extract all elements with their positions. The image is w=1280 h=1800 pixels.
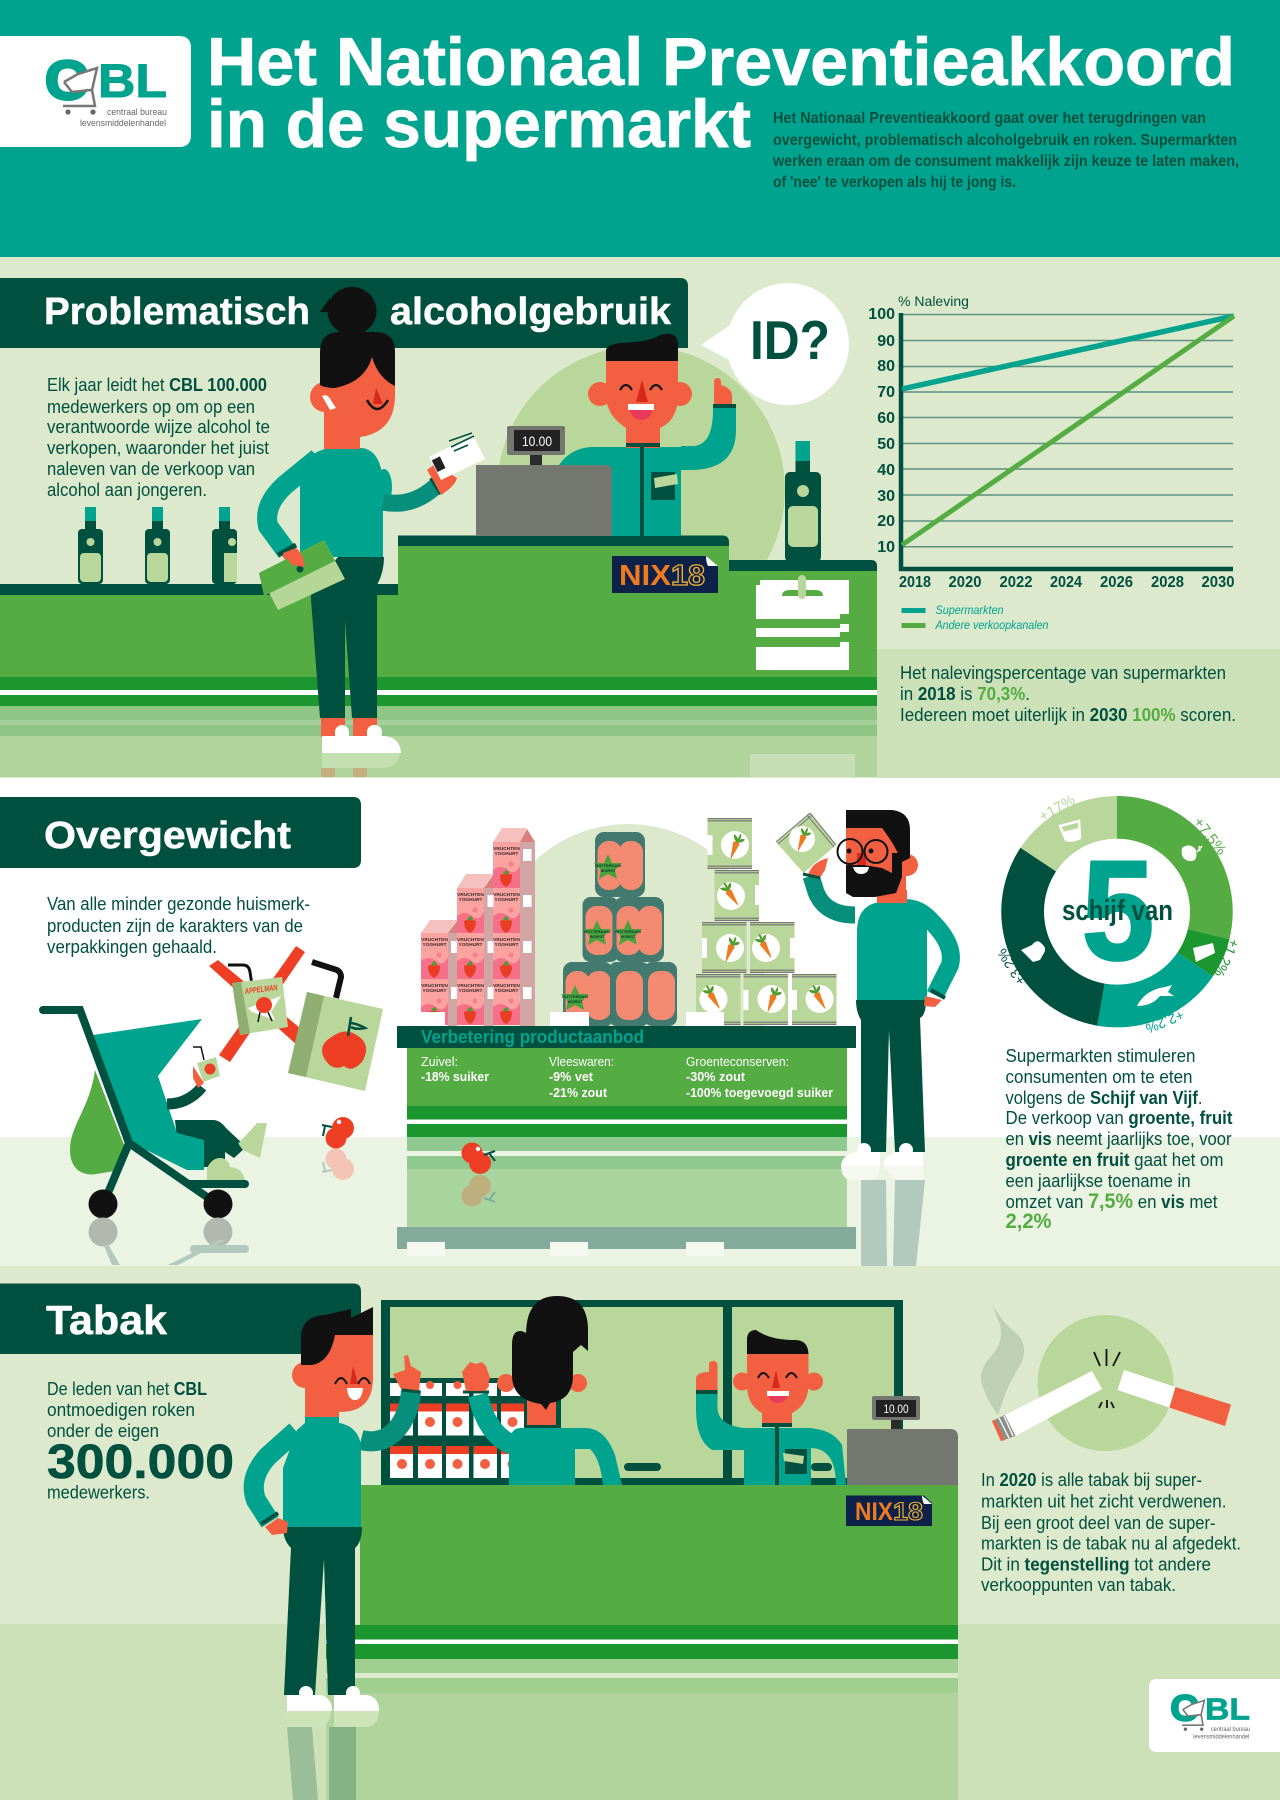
header logo panel: levensmiddelenhandel [80, 118, 166, 129]
product stack: yoghurt cartons: VRUCHTEN [457, 892, 484, 898]
text: Groenteconserven: Groenteconserven: [686, 1055, 789, 1069]
chart: % naleving: 90 [877, 333, 895, 350]
intro text: werken eraan om de consument makkelijk zijn keuze te laten maken, [772, 153, 1239, 170]
product stack: yoghurt cartons: VRUCHTEN [457, 983, 484, 989]
text: Vleeswaren: Vleeswaren: [549, 1055, 614, 1069]
sign: NIX18: NIX [619, 560, 672, 592]
chart: % naleving: 2030 [1202, 574, 1235, 591]
footer logo panel: levensmiddelenhandel [1193, 1733, 1249, 1740]
text: Schijf van Vijf [1006, 1046, 1233, 1233]
icon: bottles on shelf [78, 507, 237, 584]
sign: NIX18 tobacco: NIX [855, 1498, 893, 1526]
product stack: yoghurt cartons: VRUCHTEN [457, 937, 484, 943]
icon: apple on floor [462, 1142, 495, 1206]
banner: Tabak [0, 1284, 361, 1354]
text: Schijf van Vijf: omzet van 7,5% en vis met [1006, 1190, 1218, 1213]
text: tabak uit het zicht: In 2020 is alle tabak bij super- [981, 1470, 1202, 1490]
footer logo panel: centraal bureau [1211, 1726, 1251, 1733]
header logo panel: C [45, 49, 88, 111]
chart: schijf van vijf donut: +7,5% [1190, 814, 1230, 858]
chart: % naleving: 20 [877, 513, 895, 530]
chart: schijf van vijf donut: 5 [1082, 831, 1154, 989]
text: huismerk verpakkingen [47, 894, 310, 957]
text: CBL 100.000 employees: verantwoorde wijze alcohol te [47, 417, 270, 437]
chart: % naleving: 2022 [1000, 574, 1033, 591]
chart: % naleving: % Naleving [898, 293, 969, 309]
stroller illustration [43, 1010, 267, 1265]
register body [476, 465, 612, 536]
sign: NIX18 tobacco [846, 1496, 932, 1526]
speech bubble: ID?: ID? [750, 309, 830, 371]
intro text [772, 110, 1239, 191]
product stack: carrot cans [696, 818, 836, 1025]
product stack: yoghurt cartons: VRUCHTEN [493, 846, 520, 852]
panel: tobacco counter and window [326, 1300, 958, 1800]
panel: verbetering productaanbod counter [397, 1012, 856, 1256]
header logo panel [0, 36, 191, 147]
intro text: of 'nee' te verkopen als hij te jong is. [773, 174, 1016, 191]
icon: cash register tobacco: 10.00 [884, 1402, 909, 1416]
text: tabak uit het zicht: Bij een groot deel van de super- [981, 1513, 1216, 1533]
product stack: meat packs: WORST [590, 934, 605, 939]
text: Zuivel: -18% suiker [421, 1070, 489, 1084]
product stack: yoghurt cartons: YOGHURT [494, 897, 519, 903]
product stack: yoghurt cartons: VRUCHTEN [493, 937, 520, 943]
chart: % naleving: 10 [877, 539, 895, 556]
chart: % naleving: 2024 [1050, 574, 1082, 591]
product stack: meat packs [561, 832, 677, 1027]
text: Schijf van Vijf: en vis neemt jaarlijks toe, voor [1006, 1129, 1232, 1149]
icon: bottle on counter [785, 441, 821, 562]
icon: fallen apple [322, 1117, 354, 1180]
text: Groenteconserven: -100% toegevoegd suiker [686, 1086, 833, 1100]
product stack: yoghurt cartons: YOGHURT [494, 942, 519, 948]
product stack: meat packs: ROTTERDAM [615, 929, 641, 934]
text: CBL 100.000 employees [47, 375, 270, 500]
product stack: yoghurt cartons: YOGHURT [458, 988, 483, 994]
callout: nalevingspercentage [900, 663, 1236, 725]
banner: Tabak: Tabak [46, 1297, 167, 1343]
icon: cash register: 10.00 [522, 433, 552, 449]
chart: % naleving: 2020 [948, 574, 982, 591]
cashier character [559, 334, 736, 536]
intro text: overgewicht, problematisch alcoholgebruik en roken. Supermarkten [773, 132, 1237, 149]
icon: cigarette packs on shelf [390, 1381, 524, 1478]
text: CBL 100.000 employees: medewerkers op om op een [47, 397, 255, 417]
text: Vleeswaren: -21% zout [549, 1086, 608, 1100]
text: Schijf van Vijf: consumenten om te eten [1006, 1067, 1192, 1087]
icon: paper bags [756, 575, 849, 670]
chart legend: Andere verkoopkanalen [935, 620, 1048, 632]
title [207, 24, 1235, 162]
text: tabak uit het zicht [981, 1470, 1241, 1595]
text: 300.000 medewerkers: 300.000 [47, 1436, 234, 1489]
text: Schijf van Vijf: een jaarlijkse toename in [1006, 1171, 1190, 1191]
callout: nalevingspercentage: in 2018 is 70,3%. [900, 684, 1030, 704]
product stack: meat packs: ROTTERDAM [595, 863, 621, 868]
icon: cash register tobacco [847, 1396, 958, 1485]
text: huismerk verpakkingen: Van alle minder gezonde huismerk- [47, 894, 310, 914]
cashier character right [696, 1330, 846, 1485]
text: tabak uit het zicht: markten uit het zicht verdwenen. [981, 1492, 1226, 1512]
header logo panel: BL [98, 54, 167, 107]
product stack: meat packs: ROTTERDAM [584, 929, 610, 934]
chart: schijf van vijf donut: +1,2% [1211, 936, 1243, 980]
chart: schijf van vijf donut: +2,2% [1143, 1007, 1187, 1037]
panel: verbetering productaanbod counter: Verbetering productaanbod [421, 1026, 644, 1047]
icon: apple juice package [288, 962, 383, 1091]
chart: % naleving: 30 [877, 488, 895, 505]
product stack: yoghurt cartons: YOGHURT [422, 942, 447, 948]
product stack: yoghurt cartons: YOGHURT [458, 942, 483, 948]
chart: % naleving: 70 [877, 384, 895, 401]
text: Zuivel: Zuivel: [421, 1055, 458, 1069]
title: in de supermarkt [207, 86, 751, 162]
footer logo panel [1149, 1679, 1280, 1752]
text: Schijf van Vijf: groente en fruit gaat het om [1006, 1150, 1224, 1170]
footer logo panel: BL [1205, 1691, 1250, 1726]
chart: schijf van vijf donut: schijf van [1062, 895, 1173, 927]
product stack: yoghurt cartons [421, 828, 535, 1026]
header logo panel: centraal bureau [107, 107, 167, 118]
text: Vleeswaren: -9% vet [549, 1070, 594, 1084]
man character left [254, 1307, 421, 1800]
product stack: meat packs: WORST [568, 999, 583, 1004]
text: tabak uit het zicht: Dit in tegenstelling tot andere [981, 1554, 1211, 1574]
title: Het Nationaal Preventieakkoord [207, 24, 1235, 100]
chart: % naleving: 100 [868, 306, 895, 323]
product stack: yoghurt cartons: VRUCHTEN [421, 983, 448, 989]
intro text: Het Nationaal Preventieakkoord gaat over het terugdringen van [773, 110, 1206, 127]
text: huismerk verpakkingen: producten zijn de karakters van de [47, 916, 303, 936]
speech bubble: ID? [701, 283, 849, 405]
chart: % naleving: 40 [877, 462, 895, 479]
text: 300.000 medewerkers: De leden van het CBL [47, 1379, 207, 1399]
panel: alcohol scene background counter [0, 346, 877, 777]
product stack: yoghurt cartons: VRUCHTEN [421, 937, 448, 943]
product stack: yoghurt cartons: YOGHURT [494, 851, 519, 857]
icon: broken cigarette [981, 1304, 1231, 1451]
text: Zuivel [421, 1055, 489, 1084]
text: Groenteconserven: -30% zout [686, 1070, 746, 1084]
chart: % naleving: 2028 [1151, 574, 1184, 591]
banner: Overgewicht: Overgewicht [44, 815, 291, 857]
product stack: meat packs: ROTTERDAM [562, 994, 588, 999]
sign: NIX18: 18 [671, 560, 705, 592]
banner: Problematisch alcoholgebruik: Problematisch [44, 291, 310, 333]
banner: Problematisch alcoholgebruik [0, 278, 688, 348]
panel: backdrop circle products [492, 824, 764, 1026]
chart: % naleving: 2026 [1100, 574, 1133, 591]
product stack: yoghurt cartons: VRUCHTEN [493, 983, 520, 989]
woman character [259, 287, 485, 777]
icon: cash register [507, 426, 565, 466]
text: 300.000 medewerkers: ontmoedigen roken [47, 1400, 195, 1420]
text: 300.000 medewerkers: medewerkers. [47, 1482, 150, 1502]
text: Schijf van Vijf: 2,2% [1006, 1210, 1052, 1233]
bearded man character [776, 810, 951, 1266]
text: Schijf van Vijf: De verkoop van groente, fruit [1006, 1108, 1233, 1128]
callout: nalevingspercentage: Iedereen moet uiterlijk in 2030 100% scoren. [900, 705, 1236, 725]
product stack: yoghurt cartons: YOGHURT [422, 988, 447, 994]
text: Vleeswaren [549, 1055, 614, 1100]
chart: % naleving [868, 293, 1235, 591]
chart legend [902, 605, 1048, 632]
text: tabak uit het zicht: verkooppunten van tabak. [981, 1575, 1176, 1595]
footer logo panel: C [1170, 1688, 1198, 1729]
icon: crossed out appelman box: APPELMAN [243, 983, 278, 996]
text: Schijf van Vijf: Supermarkten stimuleren [1006, 1046, 1196, 1066]
woman from behind [462, 1296, 622, 1485]
product stack: yoghurt cartons: VRUCHTEN [493, 892, 520, 898]
chart: schijf van vijf donut [994, 791, 1243, 1037]
chart: % naleving: 2018 [899, 574, 931, 591]
text: CBL 100.000 employees: verkopen, waaronder het juist [47, 438, 269, 458]
text: 300.000 medewerkers: onder de eigen [47, 1421, 159, 1441]
text: tabak uit het zicht: markten is de tabak nu al afgedekt. [981, 1534, 1241, 1554]
icon: crossed out appelman box [209, 946, 306, 1062]
sign: NIX18 tobacco: 18 [893, 1498, 923, 1526]
chart: % naleving: 50 [877, 436, 895, 453]
banner: Overgewicht [0, 797, 361, 868]
text: CBL 100.000 employees: naleven van de verkoop van [47, 459, 255, 479]
text: 300.000 medewerkers [47, 1379, 234, 1502]
callout: nalevingspercentage: Het nalevingspercentage van supermarkten [900, 663, 1226, 683]
product stack: yoghurt cartons: YOGHURT [458, 897, 483, 903]
chart legend: Supermarkten [936, 605, 1004, 617]
sign: NIX18 [612, 556, 718, 593]
chart: schijf van vijf donut: +3,2% [994, 946, 1028, 988]
chart: % naleving: 60 [877, 410, 895, 427]
banner: Problematisch alcoholgebruik: alcoholgebruik [390, 291, 672, 333]
product stack: yoghurt cartons: YOGHURT [494, 988, 519, 994]
product stack: meat packs: WORST [601, 868, 616, 873]
chart: % naleving: 80 [877, 358, 895, 375]
text: CBL 100.000 employees: alcohol aan jongeren. [47, 480, 207, 500]
text: Groenteconserven [686, 1055, 833, 1100]
chart: schijf van vijf donut: +17% [1036, 791, 1078, 825]
text: Schijf van Vijf: volgens de Schijf van Vijf. [1006, 1088, 1202, 1108]
text: huismerk verpakkingen: verpakkingen gehaald. [47, 937, 217, 957]
product stack: meat packs: WORST [621, 934, 636, 939]
text: CBL 100.000 employees: Elk jaar leidt het CBL 100.000 [47, 375, 267, 395]
